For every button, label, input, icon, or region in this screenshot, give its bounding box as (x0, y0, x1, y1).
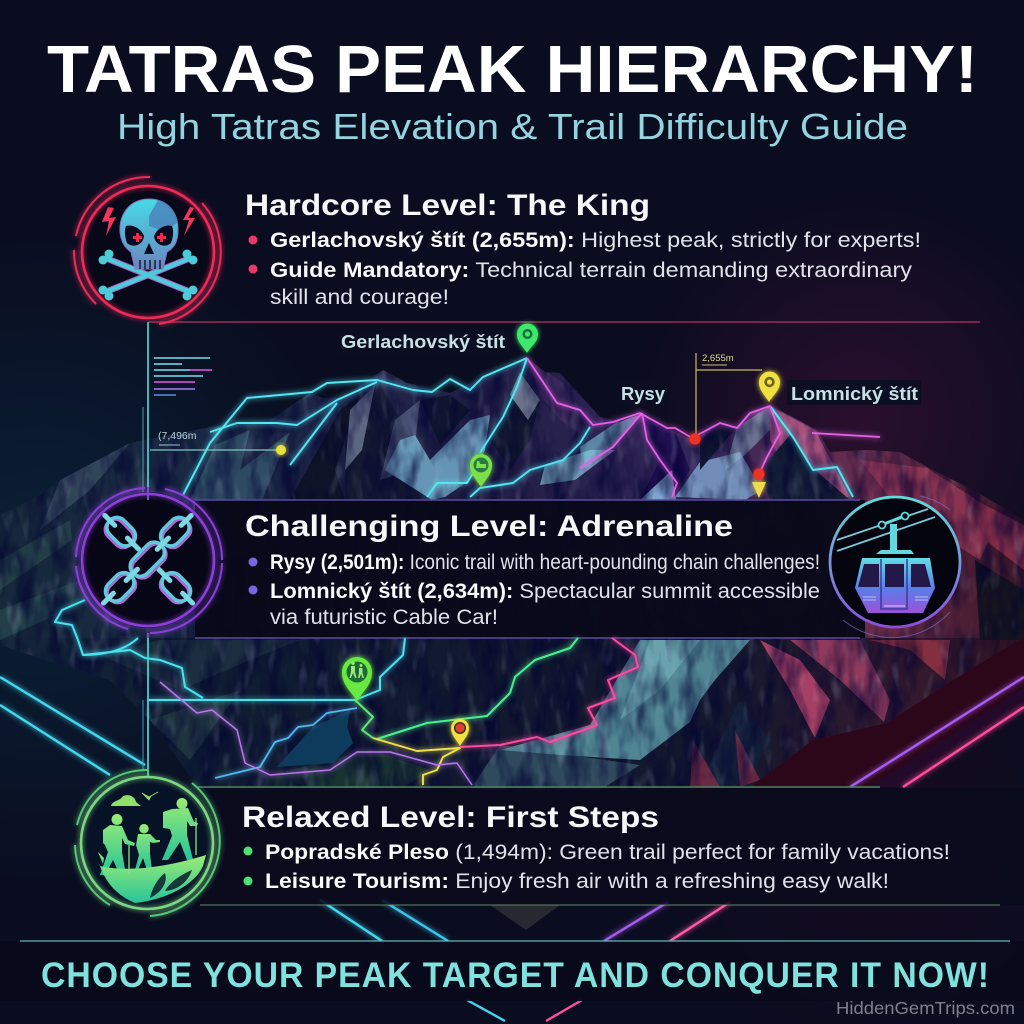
bullet: guide mandatory: Guide Mandatory: Technical terrain demanding extraordinary (270, 259, 913, 282)
cyan trails (183, 358, 853, 497)
lightning bolts (102, 207, 116, 236)
chain B with center link (96, 508, 200, 612)
crossbones (98, 250, 198, 300)
cables (837, 509, 935, 551)
bullet: leisure tourism: Leisure Tourism: Enjoy fresh air with a refreshing easy walk! (265, 870, 889, 893)
chain A (96, 508, 200, 612)
heading: Relaxed Level: First Steps (242, 801, 659, 834)
pin: lower lake green (470, 454, 492, 487)
label: Lomnický štít: Lomnický štít (791, 383, 918, 404)
label: Rysy: Rysy (621, 383, 666, 404)
mountain tip under lower panel (490, 905, 560, 930)
yellow trail (373, 738, 460, 785)
footer call to action: CHOOSE YOUR PEAK TARGET AND CONQUER IT NOW! (41, 956, 990, 995)
label: Gerlachovský štít: Gerlachovský štít (341, 331, 505, 352)
callout: 2,655m marker: 2,655m (702, 353, 734, 364)
panel: footer band (0, 941, 1024, 1001)
bullet: Rysy: Rysy (2,501m): Iconic trail with heart-pounding chain challenges! (270, 551, 820, 574)
bullet: Gerlachovský: Gerlachovský štít (2,655m): Highest peak, strictly for experts! (270, 229, 921, 252)
neon rings (74, 177, 221, 324)
bullet: Lomnický: via futuristic Cable Car! (270, 606, 498, 629)
pink trail (460, 638, 638, 747)
neon stubs below footer (467, 1000, 582, 1021)
hikers and foliage (94, 798, 206, 903)
lower mountain facets (100, 640, 950, 790)
bullet: Lomnický: Lomnický štít (2,634m): Spectacular summit accessible (270, 580, 820, 603)
pin: red and yellow marker (752, 468, 766, 498)
panel: challenging backdrop (195, 500, 865, 638)
title: TATRAS PEAK HIERARCHY! (47, 32, 978, 107)
panel: mountain map frame (143, 322, 980, 500)
green trail (377, 638, 578, 739)
watermark: HiddenGemTrips.com (836, 998, 1015, 1018)
bullet: guide mandatory (248, 259, 913, 309)
panel: relaxed level (242, 801, 950, 893)
callout: 2,496m marker (150, 430, 286, 455)
neon rings (75, 770, 220, 916)
neon rings (76, 488, 222, 633)
callout: 2,655m marker (690, 353, 762, 444)
purple trail (160, 682, 472, 785)
bullet: Popradské Pleso: Popradské Pleso (1,494m): Green trail perfect for family vacations! (265, 841, 950, 864)
cyan trail left (55, 600, 405, 700)
panel: hardcore level (245, 189, 921, 309)
blue lake trail (215, 708, 357, 778)
lower map trails (55, 600, 638, 785)
magenta trails (527, 358, 880, 497)
cabin (855, 558, 935, 613)
pin: yellow trail marker (451, 719, 469, 746)
icon: crossed chains (76, 487, 222, 638)
panel: challenging level (245, 510, 820, 629)
bullet: guide mandatory: skill and courage! (270, 286, 449, 309)
pin: Gerlachovský green (517, 324, 538, 353)
neon diagonal lines (0, 677, 1024, 1021)
heading: Challenging Level: Adrenaline (245, 510, 733, 543)
hanger (884, 516, 904, 524)
lower valley shade (102, 638, 1018, 788)
bullet: Lomnický (248, 580, 820, 629)
upper mountain facets (0, 358, 1024, 640)
icon: family hikers (75, 770, 220, 916)
icon: skull and crossbones (74, 177, 221, 324)
lake (277, 710, 353, 767)
upper map trails (183, 358, 880, 497)
cloud and bird (111, 795, 141, 806)
skull (120, 199, 178, 269)
pin: family hiker green (342, 657, 372, 701)
icon: cable car (829, 496, 961, 638)
mountain range (0, 350, 1024, 800)
heading: Hardcore Level: The King (245, 189, 650, 222)
panel: relaxed backdrop (143, 638, 1024, 905)
subtitle: High Tatras Elevation & Trail Difficulty Guide (117, 106, 908, 147)
elevation bars legend (154, 358, 212, 395)
callout: 2,496m marker: (7,496m (158, 430, 197, 442)
pin: Lomnický yellow (759, 372, 780, 402)
